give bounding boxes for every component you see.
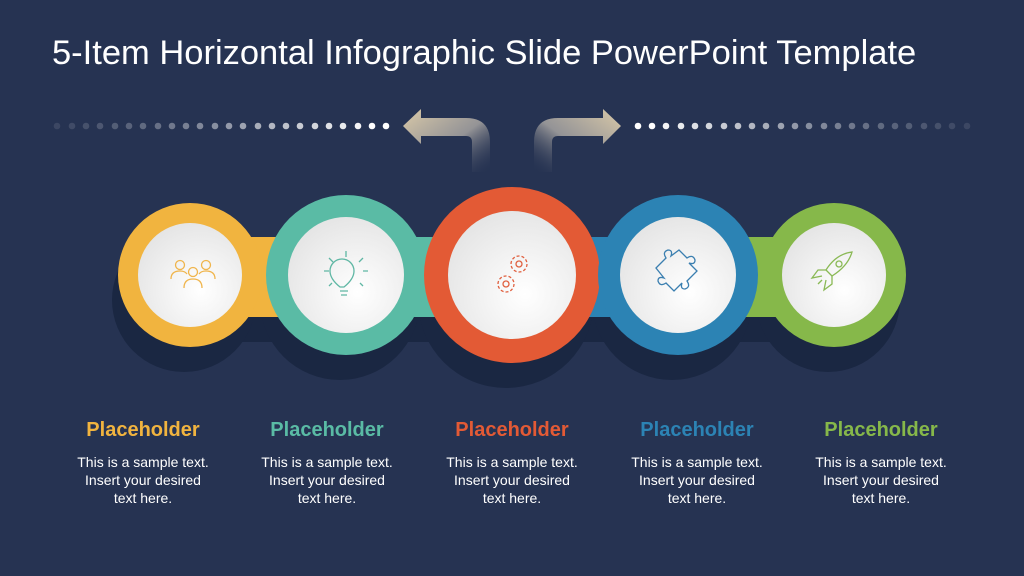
text column 4: Insert your desired: [639, 472, 755, 488]
text column 1: Insert your desired: [85, 472, 201, 488]
title: 5-Item Horizontal Infographic Slide PowerPoint Template: [52, 34, 916, 72]
text column 1: text here.: [114, 490, 172, 506]
arrow left: [403, 109, 490, 172]
text column 3: Placeholder: [455, 419, 569, 441]
text column 5: This is a sample text.: [815, 454, 947, 470]
text column 5: Insert your desired: [823, 472, 939, 488]
dotted line right: [635, 123, 970, 129]
text column 4: Placeholder: [640, 419, 754, 441]
text column 2: [261, 419, 393, 506]
text column 4: [631, 419, 763, 506]
arrow right: [534, 109, 621, 172]
text column 2: Placeholder: [270, 419, 384, 441]
text column 4: This is a sample text.: [631, 454, 763, 470]
item 4 circle: puzzle: [598, 195, 758, 355]
text column 3: text here.: [483, 490, 541, 506]
item 5 circle: rocket: [762, 203, 906, 347]
item 1 circle: team: [118, 203, 262, 347]
text column 2: text here.: [298, 490, 356, 506]
text column 1: [77, 419, 209, 506]
text column 2: This is a sample text.: [261, 454, 393, 470]
text column 4: text here.: [668, 490, 726, 506]
text column 5: text here.: [852, 490, 910, 506]
item 3 circle: gears: [424, 187, 600, 363]
text column 3: Insert your desired: [454, 472, 570, 488]
text column 3: This is a sample text.: [446, 454, 578, 470]
text column 5: Placeholder: [824, 419, 938, 441]
text column 2: Insert your desired: [269, 472, 385, 488]
shadow chain: [112, 212, 900, 388]
connectors: [190, 237, 834, 317]
text column 1: Placeholder: [86, 419, 200, 441]
text column 5: [815, 419, 947, 506]
item 2 circle: bulb: [266, 195, 426, 355]
text column 3: [446, 419, 578, 506]
text column 1: This is a sample text.: [77, 454, 209, 470]
dotted line left: [54, 123, 389, 129]
